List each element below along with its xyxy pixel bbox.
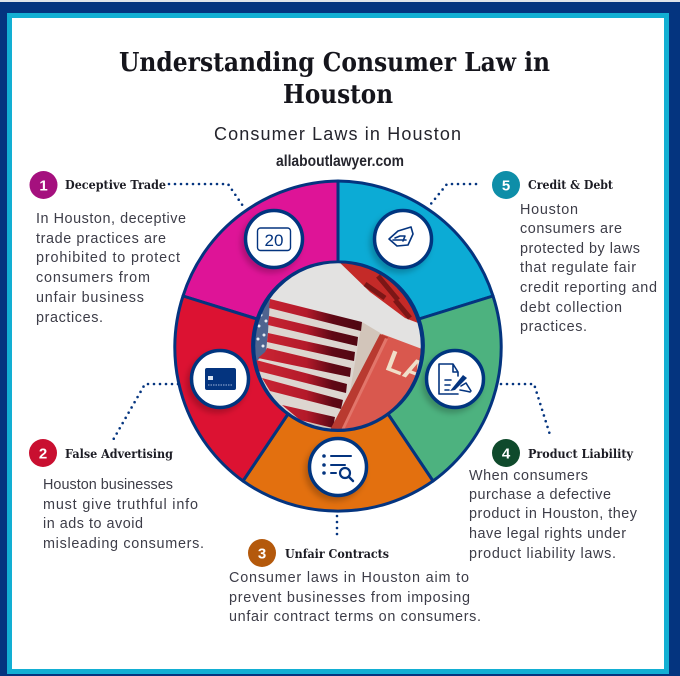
badge 3: 3 <box>258 546 266 562</box>
body 5: protected by laws <box>520 241 640 257</box>
body 3: Consumer laws in Houston aim to <box>229 570 469 586</box>
body 4: purchase a defective <box>469 487 611 503</box>
subtitle: Consumer Laws in Houston <box>214 124 461 144</box>
badge 3 <box>248 539 276 567</box>
title: Understanding Consumer Law in <box>119 48 550 78</box>
icon: price tag 20 <box>246 210 302 268</box>
heading 5: Credit & Debt <box>528 178 614 192</box>
body 4: product liability laws. <box>469 546 616 562</box>
flag canton <box>255 299 270 360</box>
callout 1: deceptive trade <box>30 171 186 326</box>
callout 5: credit and debt <box>492 171 657 335</box>
body 1: prohibited to protect <box>36 250 180 266</box>
body 5 <box>520 202 657 335</box>
heading 2: False Advertising <box>65 447 173 461</box>
body 4: When consumers <box>469 468 588 484</box>
callout 2: false advertising <box>29 439 204 552</box>
body 2: misleading consumers. <box>43 536 204 552</box>
badge 1: 1 <box>39 178 48 194</box>
badge 1 <box>30 171 58 199</box>
body 1: consumers from <box>36 270 150 286</box>
body 2: Houston businesses <box>43 477 173 493</box>
callout 3: unfair contracts <box>229 539 481 625</box>
heading 3: Unfair Contracts <box>285 547 389 561</box>
body 4: have legal rights under <box>469 526 626 542</box>
law book <box>344 334 421 428</box>
segment: product liability <box>388 296 501 481</box>
icon: document with pen <box>426 350 484 408</box>
icon: list with magnifier <box>310 438 366 496</box>
body 5: practices. <box>520 319 587 335</box>
segment: false advertising <box>175 296 288 481</box>
body 2: must give truthful info <box>43 497 198 513</box>
heading 4: Product Liability <box>528 447 634 461</box>
heading 1: Deceptive Trade <box>65 178 166 192</box>
title <box>119 48 550 110</box>
body 5: Houston <box>520 202 578 218</box>
body 3: prevent businesses from imposing <box>229 590 470 606</box>
center photo ring <box>254 262 422 430</box>
flag stripes <box>256 299 362 428</box>
body 5: credit reporting and <box>520 280 657 296</box>
callout 4: product liability <box>469 439 638 562</box>
center photo: flag and law book <box>255 263 421 429</box>
icon: hand holding money <box>374 210 432 268</box>
icon: price tag 20: 20 <box>265 231 283 250</box>
body 1: unfair business <box>36 290 144 306</box>
body 4: product in Houston, they <box>469 506 638 522</box>
book title letters: LA <box>381 345 431 390</box>
badge 4 <box>492 439 520 467</box>
segmented wheel <box>175 181 501 511</box>
segment: unfair contracts <box>243 414 433 511</box>
badge 2 <box>29 439 57 467</box>
title: Houston <box>283 80 393 110</box>
body 2: in ads to avoid <box>43 516 143 532</box>
body 5: debt collection <box>520 300 622 316</box>
dotted connectors <box>113 184 551 537</box>
website credit: allaboutlawyer.com <box>276 153 404 170</box>
body 5: consumers are <box>520 221 622 237</box>
badge 5 <box>492 171 520 199</box>
segment: credit and debt <box>338 181 493 319</box>
badge 5: 5 <box>502 178 510 194</box>
body 1: trade practices are <box>36 231 166 247</box>
body 4 <box>469 468 638 562</box>
body 1 <box>36 211 186 326</box>
body 1: practices. <box>36 310 103 326</box>
badge 2: 2 <box>39 446 47 462</box>
body 3 <box>229 570 481 625</box>
segment: deceptive trade <box>183 181 338 319</box>
body 5: that regulate fair <box>520 260 636 276</box>
body 3: unfair contract terms on consumers. <box>229 609 481 625</box>
body 1: In Houston, deceptive <box>36 211 186 227</box>
badge 4: 4 <box>502 446 511 462</box>
body 2 <box>43 477 204 552</box>
icon: credit card <box>192 350 248 408</box>
